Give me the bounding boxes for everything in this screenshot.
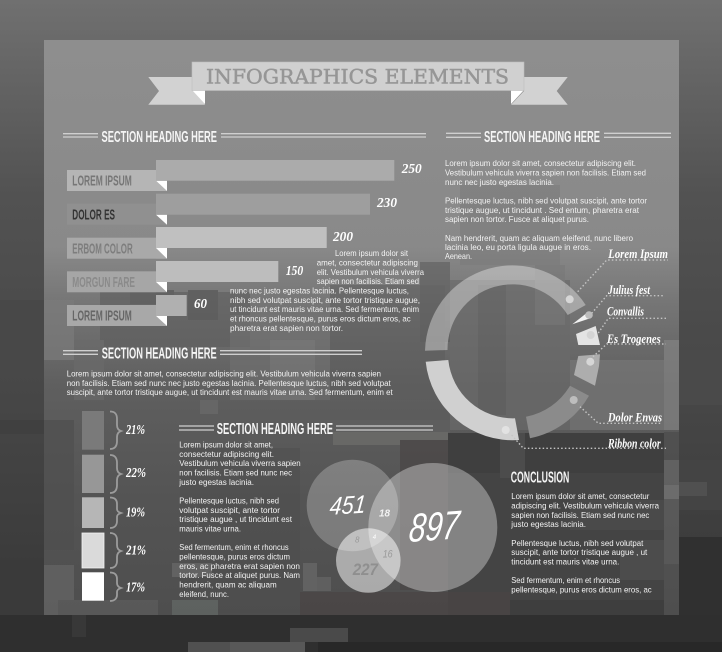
section heading: middle: SECTION HEADING HERE (102, 346, 217, 362)
conclusion text: Sed fermentum, enim et rhoncus (511, 575, 620, 585)
bar row 1: 250 (401, 162, 422, 177)
text block: middle: suscipit, ante tortor tristique augue, ut tincidunt est mauris vitae urna. Sed fermentum, enim et (67, 387, 393, 397)
percentages (125, 423, 146, 595)
text block beside bars: amet, consectetur adipiscing (317, 258, 418, 268)
bar row 4: 150 (286, 264, 303, 279)
percentages: 22% (125, 466, 146, 481)
text block: right column: Vestibulum vehicula viverra sapien non facilisis. Etiam sed (445, 168, 646, 178)
text block: lower: consectetur adipiscing elit. (179, 449, 274, 459)
percentages: 17% (126, 580, 145, 595)
bar row 2: 230 (376, 196, 397, 211)
bar row 2: DOLOR ES (72, 206, 115, 223)
conclusion text: sapien non facilisis. Etiam sed nunc nec (511, 510, 650, 520)
bar row 4: MORGUN FARE (72, 274, 135, 291)
text block: right column: Aenean. (445, 251, 472, 261)
text block: right column: tristique augue, ut tincidunt . Sed entum, pharetra erat (445, 205, 640, 215)
text block: right column: sapien non tortor. Fusce at aliquet purus. (445, 214, 589, 224)
text block: lower: eleifend, nunc. (179, 589, 229, 599)
donut labels: Es Trogenes (606, 331, 661, 346)
text block: lower: volutpat suscipit, ante tortor (179, 505, 280, 515)
text block: lower: mauris vitae urna. (179, 524, 241, 534)
bar row 5: 60 (194, 297, 207, 312)
conclusion text: Pellentesque luctus, nibh sed volutpat (511, 538, 644, 548)
donut segment 4 (574, 354, 600, 386)
percentages: 19% (126, 505, 145, 520)
donut labels: Ribbon color (607, 436, 661, 451)
conclusion text: tincidunt est mauris vitae urna. (511, 556, 619, 566)
bar row 5: LOREM IPSUM (72, 308, 132, 325)
text block: right column: nunc nec justo egestas lacinia. (445, 177, 554, 187)
text block beside bars: nunc nec justo egestas lacinia. Pellentesque luctus, (230, 286, 409, 296)
circle 227 (336, 528, 401, 593)
text block: lower: Sed fermentum, enim et rhoncus (179, 542, 289, 552)
section heading: lower: SECTION HEADING HERE (217, 421, 333, 438)
conclusion block (510, 469, 659, 594)
conclusion text: suscipit, ante tortor tristique augue , ut (511, 547, 648, 557)
ribbon band (192, 62, 524, 90)
venn diagram (307, 460, 497, 593)
left ribbon fold (192, 90, 205, 104)
text block: lower: tortor. Fusce at aliquet purus. Nam (179, 570, 300, 580)
donut segment 5 (526, 386, 589, 438)
text block beside bars: Lorem ipsum dolor sit (335, 248, 409, 258)
text block: right column (445, 158, 647, 261)
bar row 2 (67, 194, 397, 225)
donut chart (425, 246, 668, 451)
text block: middle: Lorem ipsum dolor sit amet, consectetur adipiscing elit. Vestibulum vehicula viverra sapien (67, 368, 381, 378)
donut labels: Convallis (607, 304, 644, 319)
stacked percentage column (82, 411, 146, 601)
section heading: bar chart: SECTION HEADING HERE (102, 129, 217, 146)
bar row 1: LOREM IPSUM (72, 173, 132, 190)
title ribbon (148, 62, 568, 105)
dotted leader lines (512, 260, 668, 448)
swatch 17% (82, 572, 104, 601)
swatch 22% (82, 455, 104, 493)
section heading: bar chart (63, 129, 426, 146)
donut segment 2 (572, 312, 591, 324)
donut labels: Julius fest (607, 282, 650, 297)
section heading: right column: SECTION HEADING HERE (484, 129, 600, 146)
donut labels: Dolor Envas (607, 410, 662, 425)
conclusion text: pellentesque, purus eros dictum eros, ac (511, 584, 652, 594)
text block beside bars: et rhoncus pellentesque, purus eros dictum eros, ac (230, 314, 411, 324)
text block: right column: Lorem ipsum dolor sit amet, consectetur adipiscing elit. (445, 158, 636, 168)
text block: lower: Pellentesque luctus, nibh sed (179, 496, 279, 506)
conclusion text: Lorem ipsum dolor sit amet, consectetur (511, 491, 649, 501)
text block beside bars: ut tincidunt est mauris vitae urna. Sed fermentum, enim (230, 304, 419, 314)
percentages: 21% (125, 423, 145, 438)
venn values (328, 490, 463, 579)
title: INFOGRAPHICS ELEMENTS (206, 65, 509, 88)
percentages: 21% (125, 543, 146, 558)
text block: lower: Vestibulum vehicula viverra sapien (179, 458, 301, 468)
text block: lower (178, 440, 301, 599)
bar row 3 (67, 227, 353, 259)
right ribbon fold (511, 90, 524, 104)
braces (110, 412, 121, 601)
text block beside bars: sapien non facilisis. Etiam sed (317, 276, 419, 286)
bar chart (67, 160, 422, 326)
donut labels (606, 246, 668, 451)
text block beside bars: elit. Vestibulum vehicula viverra (317, 267, 424, 277)
donut markers (502, 295, 595, 434)
text block: lower: hendrerit, quam ac aliquam (179, 580, 277, 590)
venn values: 16 (383, 548, 393, 560)
donut segment 1 (425, 265, 586, 351)
swatch 19% (82, 497, 104, 528)
panel backdrop (44, 40, 679, 615)
right ribbon tail (511, 77, 568, 105)
bar row 4 (67, 261, 303, 292)
text block: lower: justo egestas lacinia. (178, 477, 254, 487)
bar row 5 (67, 295, 207, 326)
conclusion text: adipiscing elit. Vestibulum vehicula viverra (511, 500, 659, 510)
donut segment 6 (426, 360, 519, 440)
text block: middle: non facilisis. Etiam sed nunc nec justo egestas lacinia. Pellentesque luctus, nibh sed volutpat (67, 378, 391, 388)
text block: lower: eros, ac pharetra erat sapien non (179, 561, 300, 571)
venn values: 451 (328, 490, 367, 521)
bar row 3: ERBOM COLOR (72, 240, 133, 257)
text block: lower: tristique augue , ut tincidunt est (179, 514, 293, 524)
venn values: 897 (407, 502, 463, 551)
circle 451 (307, 460, 398, 551)
donut segment 3 (576, 326, 600, 345)
conclusion text: justo egestas lacinia. (510, 519, 586, 529)
text block beside bars: nibh sed volutpat suscipit, ante tortor tristique augue, (230, 295, 420, 305)
text block: lower: non facilisis. Etiam sed nunc nec (179, 468, 293, 478)
text block: right column: lacinia leo, eu porta ligula augue in eros. (445, 242, 591, 252)
conclusion heading: CONCLUSION (511, 469, 569, 486)
text block: right column: Nam hendrerit, quam ac aliquam eleifend, nunc libero (445, 233, 633, 243)
bar row 3: 200 (332, 230, 353, 245)
left ribbon tail (148, 77, 205, 105)
text block beside bars: pharetra erat sapien non tortor. (230, 323, 343, 333)
text block: middle (67, 368, 393, 397)
text block: lower: Lorem ipsum dolor sit amet, (179, 440, 273, 450)
venn values: 4 (373, 535, 377, 541)
venn values: 18 (379, 509, 390, 520)
donut labels: Lorem Ipsum (607, 246, 668, 261)
conclusion text (510, 491, 659, 594)
bar row 1 (67, 160, 422, 191)
text block: lower: pellentesque, purus eros dictum (179, 552, 290, 562)
text block: right column: Pellentesque luctus, nibh sed volutpat suscipit, ante tortor (445, 196, 647, 206)
swatch 21% (82, 411, 104, 450)
swatch 21% light (82, 533, 104, 568)
venn values: 227 (352, 560, 379, 579)
text block beside bars (230, 248, 424, 333)
section heading: middle (63, 346, 362, 362)
venn values: 8 (355, 536, 360, 545)
circle 897 (368, 463, 497, 592)
